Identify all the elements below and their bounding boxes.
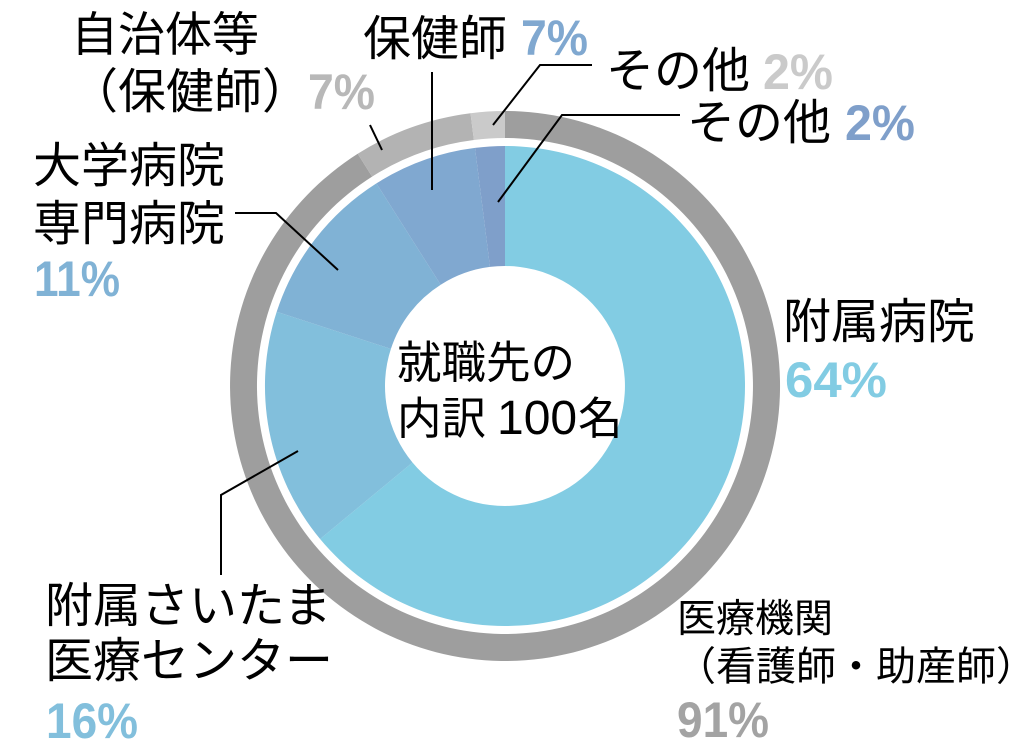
outer ring: occupation breakdown	[230, 111, 780, 661]
label: Saitama center 16%: 附属さいたま	[45, 580, 332, 633]
label: medical institutions 91%: 91%	[677, 692, 769, 748]
leader line: other 2% inner	[498, 115, 680, 202]
label: medical institutions 91%	[676, 598, 1036, 748]
label: affiliated hospital 64%: 64%	[785, 352, 887, 408]
center label	[397, 339, 623, 445]
label: university hospitals 11%: 専門病院	[33, 198, 225, 251]
label: municipal 7%: 7%	[308, 64, 375, 120]
center label: 100	[497, 392, 577, 445]
ring segment: other 2%	[470, 111, 505, 140]
label: affiliated hospital 64%	[783, 296, 975, 408]
leader line: Saitama center	[221, 451, 298, 575]
ring segment: municipal 7%	[358, 113, 474, 177]
label: municipal 7%	[70, 8, 375, 120]
center label: 名	[578, 395, 623, 444]
sector: other 2%	[475, 146, 505, 267]
label: Saitama center 16%: 16%	[46, 693, 138, 749]
label: other 2% inner	[687, 95, 915, 151]
label: other 2% outer: その他	[606, 45, 750, 98]
label: other 2% inner: その他	[687, 97, 831, 150]
ring segment: medical institutions 91%	[230, 111, 780, 661]
center label: 内訳	[397, 395, 486, 444]
sector: affiliated hospital 64%	[320, 146, 745, 626]
label: public health nurse 7%: 保健師	[363, 13, 507, 66]
label: public health nurse 7%	[363, 10, 588, 66]
label: medical institutions 91%: 医療機関	[677, 598, 833, 641]
leader line: other 2% outer	[493, 65, 592, 125]
sector: public health nurse 7%	[376, 148, 490, 285]
label: municipal 7%: 自治体等	[71, 8, 259, 61]
sector: Saitama center 16%	[265, 312, 412, 539]
leader line: university hospitals	[235, 213, 338, 270]
label: Saitama center 16%	[45, 580, 333, 749]
label: Saitama center 16%: 医療センター	[45, 635, 333, 688]
label: affiliated hospital 64%: 附属病院	[783, 296, 975, 349]
center label: 就職先の	[397, 339, 575, 388]
label: university hospitals 11%: 11%	[34, 251, 120, 307]
label: medical institutions 91%: （看護師・助産師）	[676, 645, 1036, 689]
leader line: municipal	[370, 125, 382, 150]
leader line: public health nurse	[431, 72, 433, 190]
label: public health nurse 7%: 7%	[521, 10, 588, 66]
donut chart: employer breakdown	[265, 146, 745, 626]
label: other 2% outer	[606, 44, 833, 100]
label: other 2% outer: 2%	[763, 44, 833, 100]
label: university hospitals 11%: 大学病院	[33, 140, 225, 193]
label: university hospitals 11%	[33, 140, 225, 307]
sector: university hospitals 11%	[277, 183, 441, 349]
label: other 2% inner: 2%	[845, 95, 915, 151]
label: municipal 7%: （保健師）	[70, 66, 310, 119]
